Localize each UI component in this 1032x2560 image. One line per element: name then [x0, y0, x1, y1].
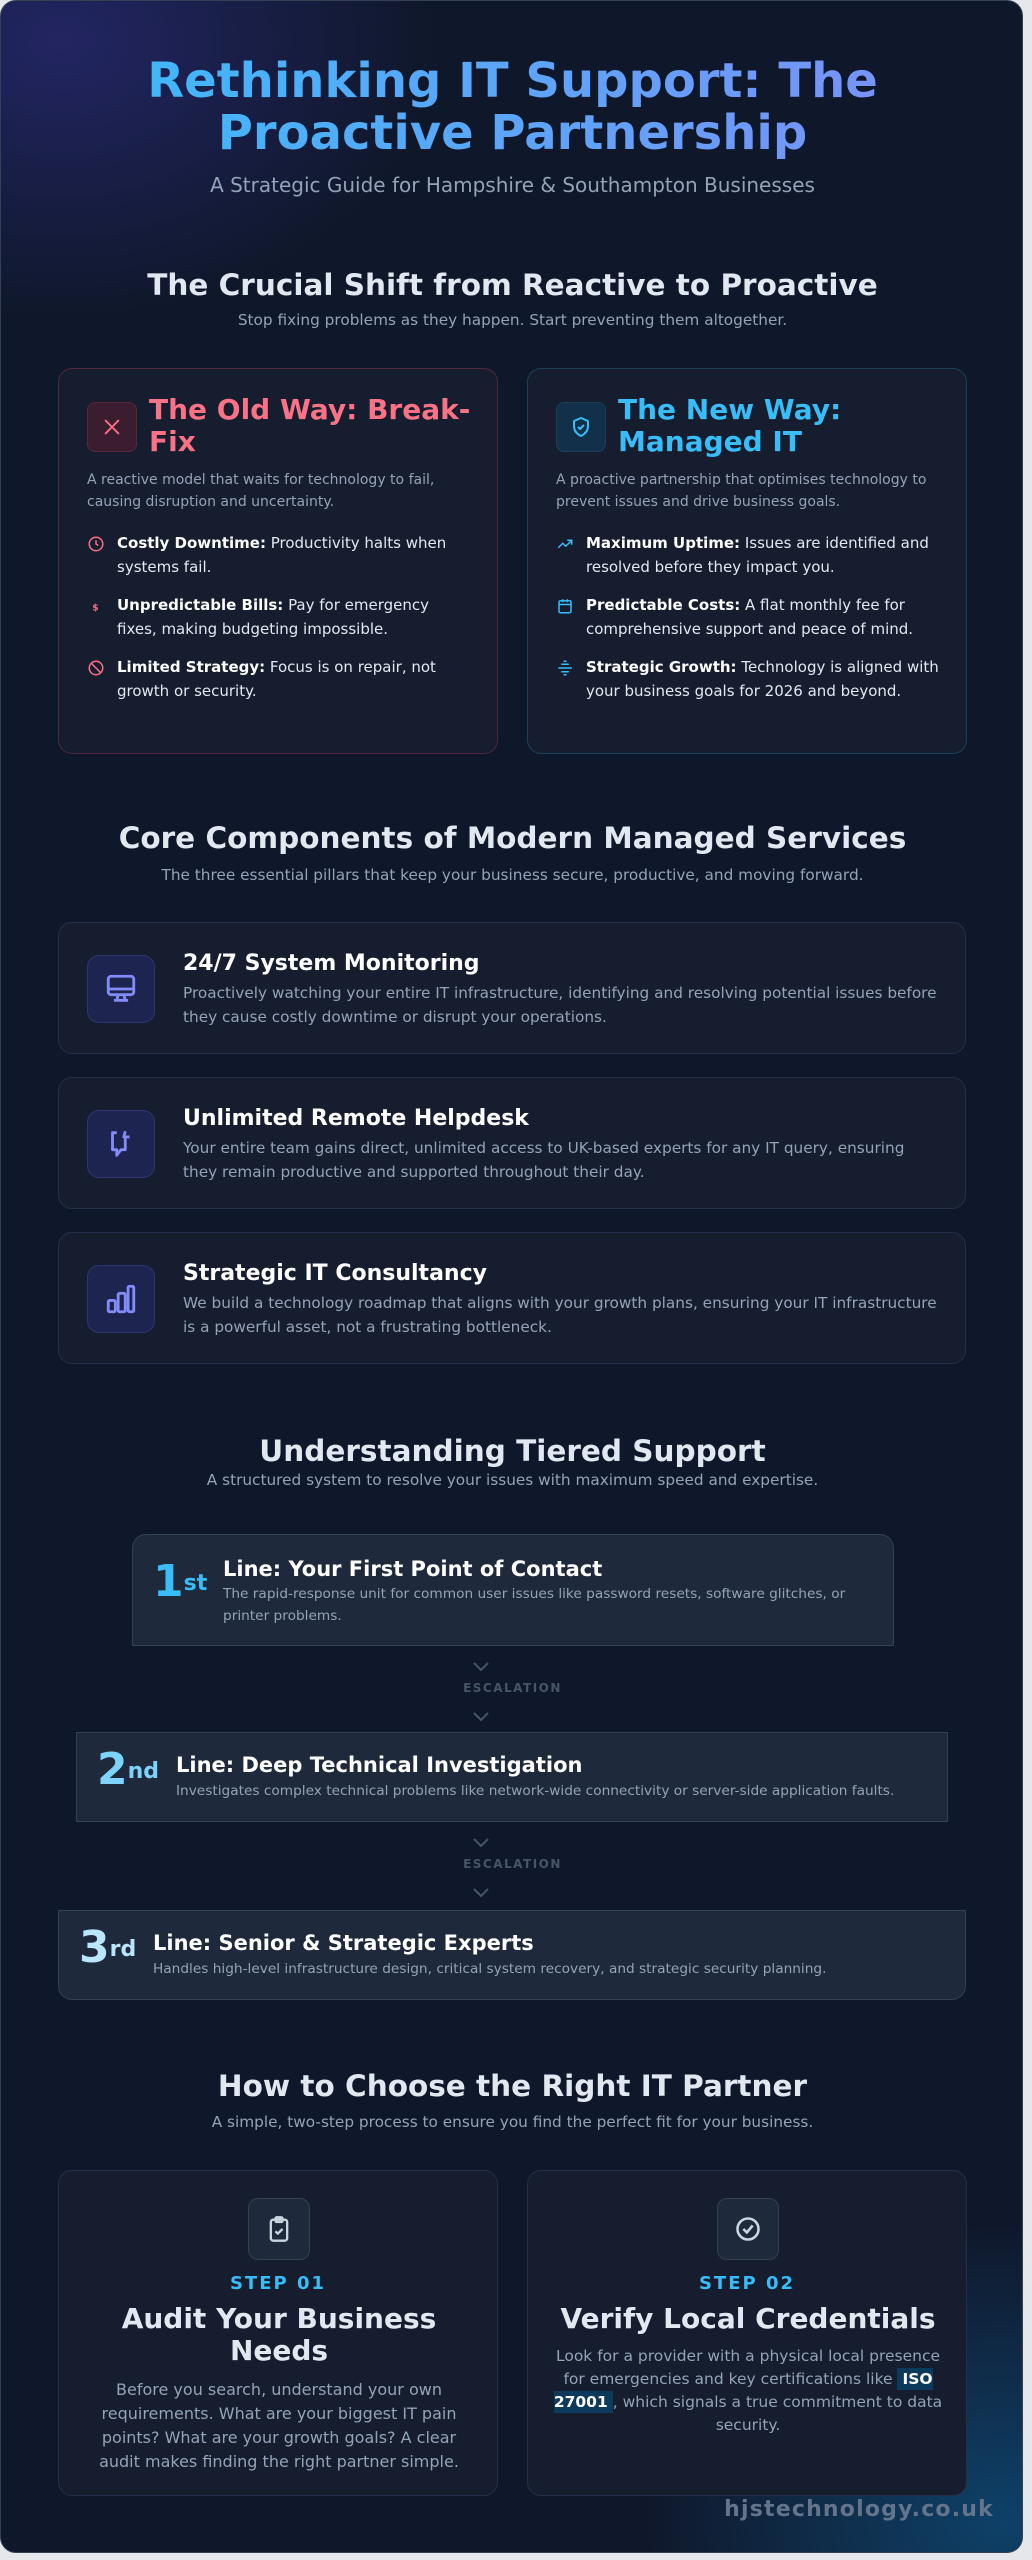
- icon: chat: [87, 1110, 155, 1178]
- step 1 card: STEP 01: [230, 2273, 326, 2294]
- icon: clipboard: [248, 2198, 310, 2260]
- heading: tiered support: Understanding Tiered Support: [259, 1434, 766, 1468]
- icon: bar chart: [87, 1265, 155, 1333]
- tier 3: Line: Senior & Strategic Experts: [153, 1931, 534, 1955]
- description: new way: A proactive partnership that optimises technology to prevent issues and drive business goals.: [556, 472, 926, 510]
- tier 1: The rapid-response unit for common user issues like password resets, software glitches, or printer problems.: [223, 1586, 845, 1624]
- title: Proactive Partnership: [218, 105, 807, 161]
- heading: core components: Core Components of Modern Managed Services: [119, 821, 906, 855]
- arrow: escalation 2: ESCALATION: [463, 1857, 562, 1871]
- tier 2: [76, 1732, 948, 1822]
- arrow: escalation 2: [463, 1838, 562, 1898]
- heading: crucial shift: The Crucial Shift from Reactive to Proactive: [147, 268, 878, 302]
- step 1 card: Before you search, understand your own requirements. What are your biggest IT pain points? What are your growth goals? A clear audit makes finding the right partner simple.: [99, 2380, 459, 2471]
- step 2 card: Look for a provider with a physical local presence for emergencies and key certifications like ISO 27001 , which signals a true commitment to data security.: [554, 2347, 942, 2434]
- item: maximum uptime: Maximum Uptime: Issues are identified and resolved before they impact you.: [586, 534, 929, 576]
- tier 1: 1st: [153, 1556, 207, 1607]
- icon: monitor: [87, 955, 155, 1023]
- arrow: escalation 1: [463, 1662, 562, 1722]
- heading: old way: The Old Way: Break-Fix: [149, 393, 470, 458]
- footer: website: hjstechnology.co.uk: [724, 2497, 994, 2522]
- tier 3: 3rd: [79, 1922, 136, 1973]
- subtitle: A Strategic Guide for Hampshire & Southampton Businesses: [210, 173, 815, 197]
- card: remote helpdesk: [58, 1077, 966, 1209]
- icon: shield: [556, 402, 606, 452]
- icon: check circle: [717, 2198, 779, 2260]
- subheading: crucial shift: Stop fixing problems as they happen. Start preventing them altogether.: [238, 311, 787, 329]
- item: unpredictable bills: Unpredictable Bills: Pay for emergency fixes, making budgeting impossible.: [117, 596, 429, 638]
- description: old way: A reactive model that waits for technology to fail, causing disruption and uncertainty.: [87, 472, 434, 510]
- step 2 card: [527, 2170, 967, 2496]
- card: system monitoring: 24/7 System Monitoring: [183, 951, 480, 976]
- subheading: core components: The three essential pillars that keep your business secure, productive, and moving forward.: [161, 866, 864, 884]
- step 1 card: Audit Your Business Needs: [122, 2302, 436, 2367]
- title: Rethinking IT Support: The: [147, 53, 878, 109]
- title: [147, 53, 878, 161]
- item: limited strategy: Limited Strategy: Focus is on repair, not growth or security.: [117, 658, 436, 700]
- heading: choose partner: How to Choose the Right IT Partner: [218, 2069, 807, 2103]
- card: system monitoring: Proactively watching your entire IT infrastructure, identifying and resolving potential issues before they cause costly downtime or disrupt your operations.: [183, 984, 937, 1026]
- tier 3: [58, 1910, 966, 2000]
- tier 1: [132, 1534, 894, 1646]
- tier 3: Handles high-level infrastructure design, critical system recovery, and strategic security planning.: [153, 1961, 826, 1977]
- item: unpredictable bills: $: [92, 604, 99, 614]
- card: system monitoring: [58, 922, 966, 1054]
- item: strategic growth: Strategic Growth: Technology is aligned with your business goals for 2026 and beyond.: [586, 658, 939, 700]
- card: IT consultancy: Strategic IT Consultancy: [183, 1261, 487, 1286]
- card: remote helpdesk: Unlimited Remote Helpdesk: [183, 1106, 529, 1131]
- heading: new way: The New Way: Managed IT: [618, 393, 841, 458]
- card: IT consultancy: [58, 1232, 966, 1364]
- subheading: choose partner: A simple, two-step process to ensure you find the perfect fit for your business.: [212, 2113, 813, 2131]
- card: remote helpdesk: Your entire team gains direct, unlimited access to UK-based experts for any IT query, ensuring they remain productive and supported throughout their day.: [183, 1139, 904, 1181]
- icon: cross: [87, 402, 137, 452]
- item: predictable costs: Predictable Costs: A flat monthly fee for comprehensive support and peace of mind.: [586, 596, 913, 638]
- arrow: escalation 1: ESCALATION: [463, 1681, 562, 1695]
- tier 2: Investigates complex technical problems like network-wide connectivity or server-side application faults.: [176, 1783, 894, 1799]
- step 2 card: STEP 02: [699, 2273, 795, 2294]
- tier 1: Line: Your First Point of Contact: [223, 1557, 602, 1581]
- item: costly downtime: Costly Downtime: Productivity halts when systems fail.: [117, 534, 446, 576]
- step 1 card: [58, 2170, 498, 2496]
- tier 2: Line: Deep Technical Investigation: [176, 1753, 582, 1777]
- card: IT consultancy: We build a technology roadmap that aligns with your growth plans, ensuring your IT infrastructure is a powerful asset, not a frustrating bottleneck.: [183, 1294, 937, 1336]
- panel: old way: [58, 368, 498, 754]
- tier 2: 2nd: [97, 1744, 159, 1795]
- subheading: tiered support: A structured system to resolve your issues with maximum speed and expertise.: [207, 1471, 818, 1489]
- panel: new way: [527, 368, 967, 754]
- step 2 card: Verify Local Credentials: [560, 2302, 936, 2335]
